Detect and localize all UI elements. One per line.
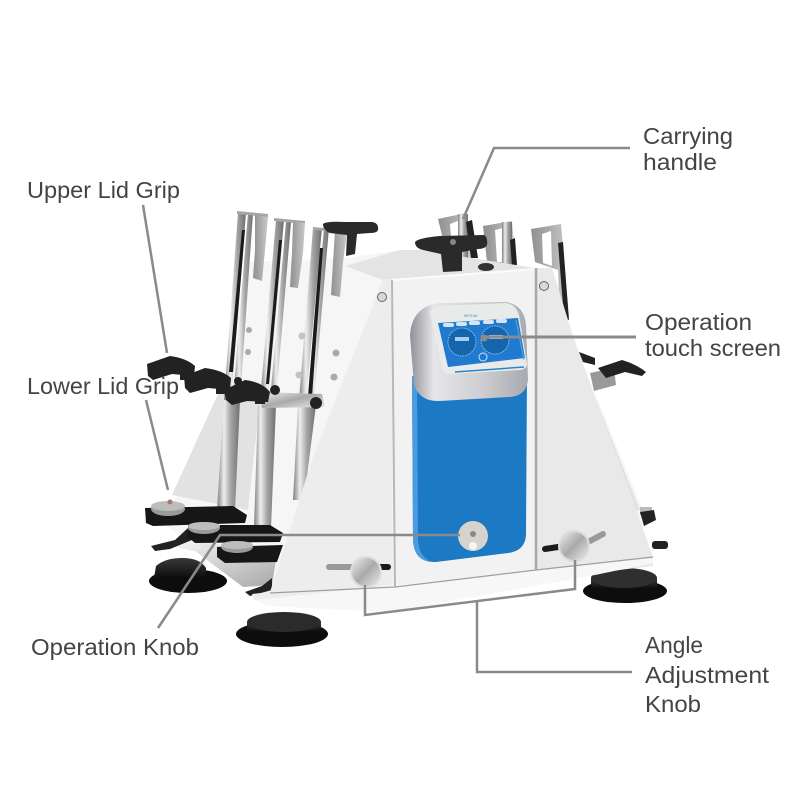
carrying handle left (323, 222, 378, 256)
top vent cap (478, 263, 494, 271)
left rack columns (217, 211, 347, 528)
machine body (252, 250, 653, 612)
control housing (410, 302, 528, 401)
leader line: operation touch screen (480, 334, 636, 342)
label: carrying handle: Carrying (643, 123, 733, 149)
label: carrying handle (643, 123, 733, 175)
leader line: operation knob (158, 535, 460, 628)
left angle knob with slot handle (329, 557, 388, 587)
leader line: carrying handle (463, 148, 630, 219)
label: operation touch screen (645, 309, 781, 361)
label: operation touch screen: Operation (645, 309, 752, 335)
leader line: lower lid grip (146, 400, 172, 504)
blue panel (412, 372, 527, 562)
back panel of the machine (165, 250, 645, 600)
label: angle adjustment knob: Angle (645, 632, 703, 658)
label: angle adjustment knob: Adjustment (645, 662, 770, 688)
operation knob (458, 521, 488, 551)
feet (149, 558, 667, 647)
label: angle adjustment knob (645, 632, 770, 717)
right angle knob with slot handle (545, 531, 603, 561)
label: upper lid grip: Upper Lid Grip (27, 177, 180, 203)
touch screen (430, 303, 527, 374)
touch screen: WPS-5A (464, 314, 478, 318)
upper lid grips (147, 356, 322, 409)
label: carrying handle: handle (643, 149, 717, 175)
right rack brackets (438, 213, 569, 320)
label: operation knob: Operation Knob (31, 634, 199, 660)
carrying handle front (415, 235, 487, 272)
lid grip silver bracket (258, 392, 325, 408)
label: operation touch screen: touch screen (645, 335, 781, 361)
base plates with lid knobs (145, 501, 283, 563)
leader line: angle adjustment knob (365, 560, 632, 672)
white strut and lower grips (151, 528, 276, 596)
leader line: upper lid grip (143, 205, 167, 353)
label: angle adjustment knob: Knob (645, 691, 701, 717)
label: lower lid grip: Lower Lid Grip (27, 373, 179, 399)
right side grips (579, 352, 668, 549)
screws (378, 282, 548, 302)
